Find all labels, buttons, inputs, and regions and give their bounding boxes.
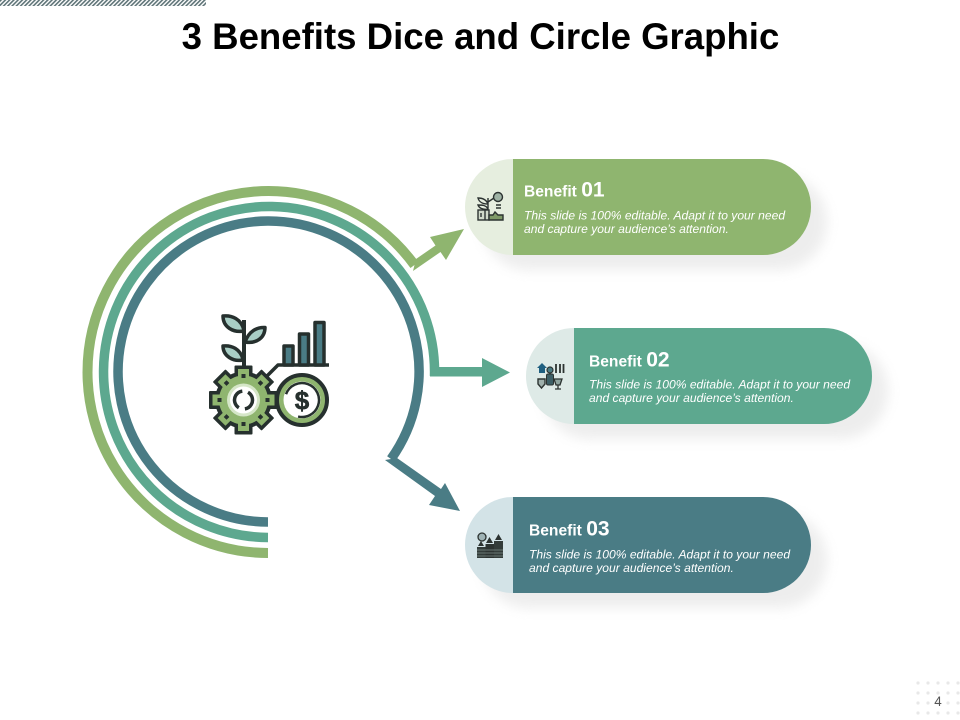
panel: benefit 03 xyxy=(465,497,827,608)
dotted corner pattern xyxy=(914,680,960,720)
body text: This slide is 100% editable. Adapt it to your need xyxy=(589,378,851,392)
heading: Benefit 02 xyxy=(589,348,670,372)
icon: gear xyxy=(209,366,278,434)
icon: bar chart xyxy=(267,322,329,376)
outer green arc with arrow xyxy=(88,191,464,553)
hatched corner strip xyxy=(0,0,206,6)
body text: This slide is 100% editable. Adapt it to your need xyxy=(524,208,786,222)
middle teal arc with arrow xyxy=(104,207,510,538)
icon: plant and buildings xyxy=(478,192,503,220)
icon: plant stem and leaves xyxy=(223,316,265,368)
panel: benefit 02 xyxy=(526,328,888,439)
panel: benefit 01 xyxy=(465,159,827,270)
icon: coin stacks xyxy=(477,533,503,558)
inner blue arc with arrow xyxy=(118,221,460,522)
title: 3 Benefits Dice and Circle Graphic xyxy=(182,16,779,57)
concentric arcs with arrows xyxy=(88,191,510,553)
heading: Benefit 03 xyxy=(529,518,610,540)
icon: people and trophies xyxy=(537,363,564,389)
body text: and capture your audience’s attention. xyxy=(589,391,794,405)
body text: and capture your audience’s attention. xyxy=(524,222,729,236)
icon: dollar coin: $ xyxy=(295,386,310,416)
body text: This slide is 100% editable. Adapt it to your need xyxy=(529,548,791,562)
central icon: plant, gear, coin and bars xyxy=(209,316,329,434)
heading: Benefit 01 xyxy=(524,178,605,202)
body text: and capture your audience’s attention. xyxy=(529,561,734,575)
page number: 4 xyxy=(934,694,942,709)
